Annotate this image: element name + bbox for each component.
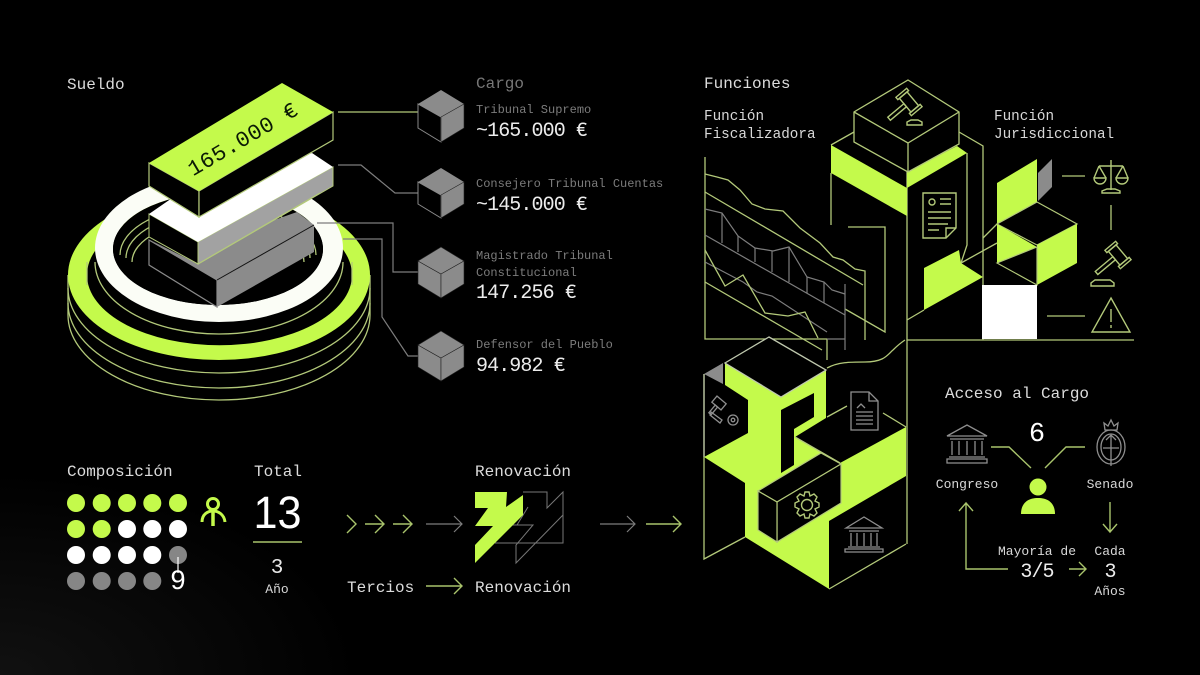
total block: Año — [265, 582, 289, 597]
icon: gear — [795, 492, 819, 518]
tower structure — [831, 80, 1134, 544]
bar: green with amount — [149, 83, 333, 217]
access diagram: Congreso — [936, 477, 998, 492]
cargo 2 text: ~145.000 € — [476, 194, 587, 217]
cube 3 — [418, 247, 464, 298]
small grey facet — [704, 363, 723, 384]
ring outlines in gap — [87, 262, 352, 334]
bar: grey — [149, 212, 314, 307]
arrows to functions — [600, 516, 681, 532]
tercios row: Renovación — [475, 579, 571, 597]
icon: renewal bolts — [475, 492, 563, 563]
white ring — [95, 174, 343, 322]
stacked ring outlines — [68, 275, 370, 400]
icon: bank — [845, 517, 883, 552]
icon: warning triangle — [1092, 298, 1130, 332]
jurisdictional block — [961, 159, 1077, 339]
heading: Función Fiscalizadora — [704, 109, 816, 143]
icon: Congreso bank — [947, 425, 987, 463]
green ring — [68, 190, 370, 360]
icon: green figure — [202, 498, 225, 526]
icon: gavel — [881, 88, 922, 128]
access diagram: Cada — [1094, 544, 1126, 559]
cargo 1 text: ~165.000 € — [476, 120, 587, 143]
heading: Acceso al Cargo: Acceso al Cargo — [945, 385, 1089, 403]
arrows — [1103, 502, 1117, 532]
lower isometric structure — [704, 337, 906, 589]
top diamond — [725, 337, 826, 397]
heading: Composición: Composición — [67, 463, 173, 481]
heading: Función Fiscalizadora: Función — [704, 109, 764, 125]
second green line — [705, 250, 818, 338]
icon: gavel right base — [1091, 280, 1114, 286]
gear box — [758, 453, 841, 542]
access diagram: 3 — [1104, 561, 1116, 584]
icon: gavel right — [1089, 241, 1131, 282]
total block — [253, 463, 302, 597]
cargo 3 text — [476, 249, 613, 305]
green mountain line — [705, 174, 865, 340]
ring hole — [113, 193, 323, 305]
access diagram: Senado — [1087, 477, 1133, 492]
connector lines — [317, 112, 418, 356]
icon: scales — [1094, 160, 1128, 193]
dot grid — [67, 494, 187, 595]
tercios row: Tercios — [347, 579, 414, 597]
cargo 4 text: Defensor del Pueblo — [476, 338, 613, 352]
heading: Sueldo: Sueldo — [67, 76, 125, 94]
bar: white — [149, 153, 333, 264]
heading: Funciones: Funciones — [704, 75, 790, 93]
access diagram: 3/5 — [1020, 561, 1054, 584]
green bands — [831, 145, 907, 216]
icon: Senado emblem — [1097, 420, 1125, 466]
icon: gavel and gear — [705, 396, 738, 425]
total block: 3 — [271, 557, 283, 580]
cube 1 — [418, 90, 464, 142]
amount label: 165.000 € — [184, 98, 304, 183]
cargo 3 text: Magistrado Tribunal — [476, 249, 613, 263]
cargo 1 text — [476, 103, 591, 143]
line chart panel — [705, 157, 885, 360]
cargo 3 text: 147.256 € — [476, 282, 576, 305]
cube 2 — [418, 168, 464, 218]
F-shaped cut — [781, 393, 814, 473]
arrows to renovation — [347, 515, 462, 533]
icon: document — [923, 193, 956, 238]
links to person — [991, 447, 1085, 468]
top cube — [854, 80, 959, 172]
number 6: 6 — [1029, 420, 1045, 450]
icon: document small — [851, 392, 878, 430]
cargo 2 text: Consejero Tribunal Cuentas — [476, 177, 663, 191]
heading: Función Jurisdiccional — [994, 109, 1114, 143]
cargo 3 text: Constitucional — [476, 266, 577, 280]
number 9: 9 — [170, 565, 186, 595]
heading: Renovación: Renovación — [475, 463, 571, 481]
cargo 4 text: 94.982 € — [476, 355, 565, 378]
labels: Mayoría de — [998, 544, 1076, 559]
access diagram: Años — [1094, 584, 1126, 599]
outer edges — [704, 374, 906, 589]
inner ring lines — [120, 205, 316, 262]
heading: Función Fiscalizadora: Fiscalizadora — [704, 127, 816, 143]
number 13: 13 — [254, 487, 302, 538]
illustration: salary stack on rings — [68, 83, 370, 400]
heading: Función Jurisdiccional: Jurisdiccional — [994, 127, 1114, 143]
icon: person — [1021, 478, 1055, 514]
big green shape — [704, 363, 906, 589]
heading: Función Jurisdiccional: Función — [994, 109, 1054, 125]
grey mountain line — [705, 209, 845, 294]
total block: Total — [254, 463, 302, 481]
heading: Cargo: Cargo — [476, 75, 524, 93]
access diagram — [936, 420, 1133, 599]
tercios row — [347, 578, 571, 597]
cargo 1 text: Tribunal Supremo — [476, 103, 591, 117]
icon links — [1047, 176, 1111, 316]
cube 4 — [418, 331, 464, 381]
lower green block — [924, 250, 983, 310]
icon: gavel base — [907, 120, 922, 125]
cargo 2 text — [476, 177, 663, 217]
cargo 4 text — [476, 338, 613, 378]
